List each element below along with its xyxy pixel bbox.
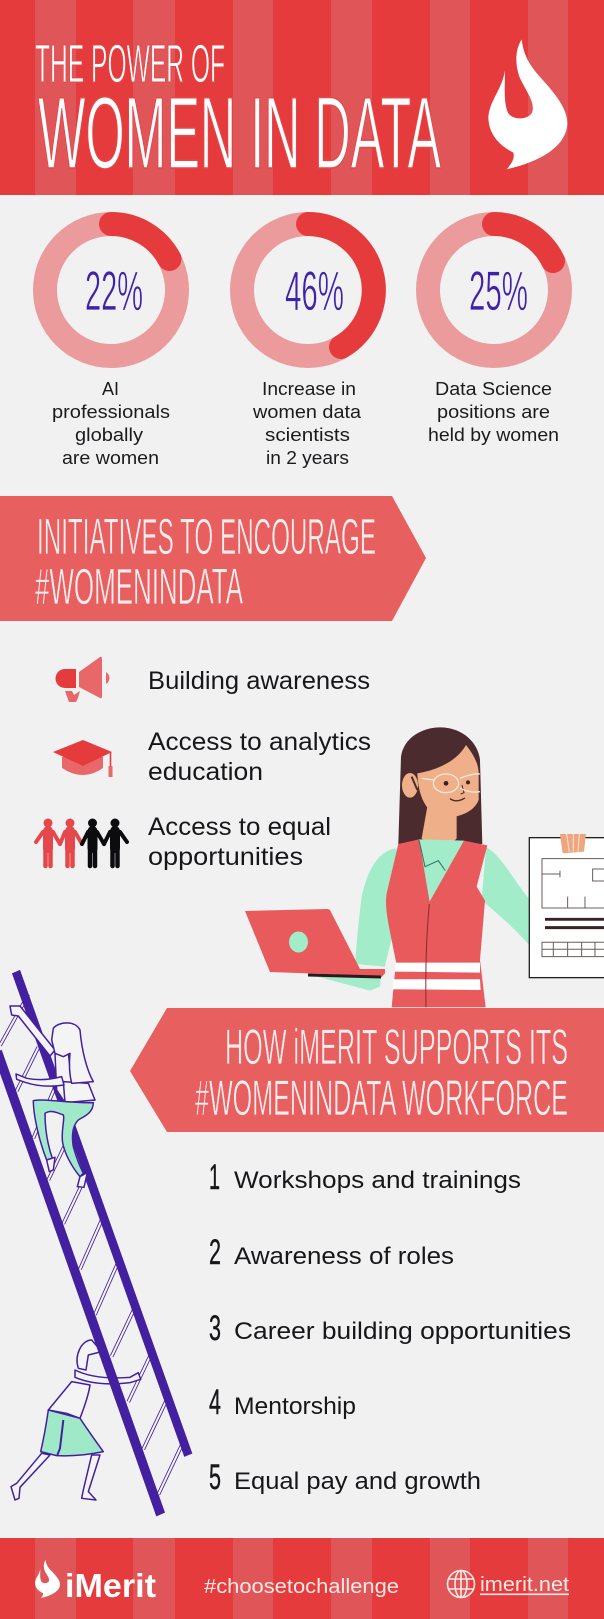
numbered list xyxy=(209,1158,571,1497)
numbered list: Workshops and trainings xyxy=(234,1167,521,1194)
header band xyxy=(0,0,604,195)
donut chart: 22% xyxy=(45,224,177,356)
banner: how iMerit supports xyxy=(130,1008,604,1132)
illustration: woman holding laptop and blueprint xyxy=(245,727,604,1007)
numbered list: 2 xyxy=(209,1233,221,1272)
donut label: data science: Data Science xyxy=(435,379,552,399)
list text: analytics education: Access to analytics xyxy=(148,728,371,756)
icon: graduation cap xyxy=(53,740,112,777)
footer band xyxy=(0,1538,604,1619)
list text: equal opportunities xyxy=(148,813,331,871)
donut label: AI professionals: professionals xyxy=(52,402,170,422)
numbered list: 5 xyxy=(209,1458,221,1497)
icon: people holding hands xyxy=(36,818,127,866)
footer logo xyxy=(35,1560,156,1604)
donut label: data science: positions are xyxy=(437,402,550,422)
list text: building awareness: Building awareness xyxy=(148,667,370,695)
numbered list: Awareness of roles xyxy=(234,1243,454,1270)
donut label: data science xyxy=(428,379,559,445)
pushing woman xyxy=(11,1340,141,1500)
list text: analytics education xyxy=(148,728,371,786)
icon: iMerit flame logo xyxy=(488,39,567,169)
banner: initiatives: #WOMENINDATA xyxy=(35,558,243,615)
numbered list: Equal pay and growth xyxy=(234,1468,481,1495)
list text: equal opportunities: opportunities xyxy=(148,843,303,871)
figure xyxy=(308,727,604,1007)
donut chart: 22%: 22% xyxy=(85,259,143,322)
donut label: increase: in 2 years xyxy=(266,448,349,468)
laptop xyxy=(245,909,385,977)
title xyxy=(35,34,441,190)
hashtag: #choosetochallenge xyxy=(204,1576,399,1598)
blueprint board xyxy=(529,838,604,978)
donut label: increase xyxy=(252,379,362,468)
ladder rails xyxy=(0,972,188,1514)
donut chart: 46% xyxy=(242,224,374,356)
illustration: ladder with two climbing women xyxy=(0,972,188,1514)
numbered list: 3 xyxy=(209,1309,221,1348)
icon: megaphone xyxy=(56,657,109,702)
donut label: AI professionals xyxy=(52,379,170,468)
numbered list: 1 xyxy=(209,1158,220,1197)
list text: equal opportunities: Access to equal xyxy=(148,813,331,841)
donut label: increase: women data xyxy=(252,402,362,422)
website link: imerit.net xyxy=(480,1574,569,1596)
list text: analytics education: education xyxy=(148,758,263,786)
donut label: AI professionals: are women xyxy=(62,448,159,468)
footer logo: iMerit xyxy=(65,1567,156,1604)
icon: globe xyxy=(448,1570,474,1598)
donut label: increase: scientists xyxy=(265,425,350,445)
donut chart: 46%: 46% xyxy=(285,259,344,322)
numbered list: Career building opportunities xyxy=(234,1318,571,1345)
banner: initiatives xyxy=(0,496,426,621)
donut chart: 25%: 25% xyxy=(469,259,528,322)
climbing woman xyxy=(10,1006,95,1187)
ladder rungs xyxy=(0,995,183,1494)
donut label: data science: held by women xyxy=(428,425,559,445)
title: THE POWER OF xyxy=(35,34,225,94)
donut label: AI professionals: AI xyxy=(102,379,119,399)
donut label: increase: Increase in xyxy=(262,379,356,399)
donut label: AI professionals: globally xyxy=(75,425,143,445)
numbered list: Mentorship xyxy=(234,1393,356,1420)
donut chart: 25% xyxy=(428,224,560,356)
numbered list: 4 xyxy=(209,1383,221,1422)
